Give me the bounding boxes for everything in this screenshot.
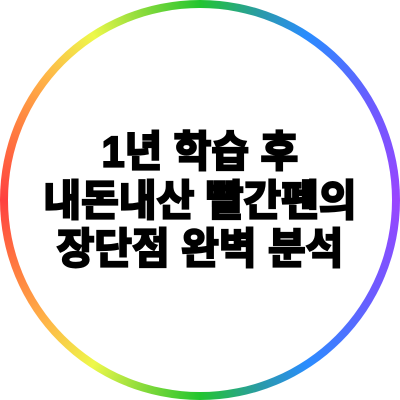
title line 2: 내돈내산 빨간펜의 [43, 177, 357, 225]
title line 1: 1년 학습 후 [102, 128, 298, 176]
title line 3: 장단점 완벽 분석 [57, 225, 343, 273]
title [43, 128, 357, 273]
